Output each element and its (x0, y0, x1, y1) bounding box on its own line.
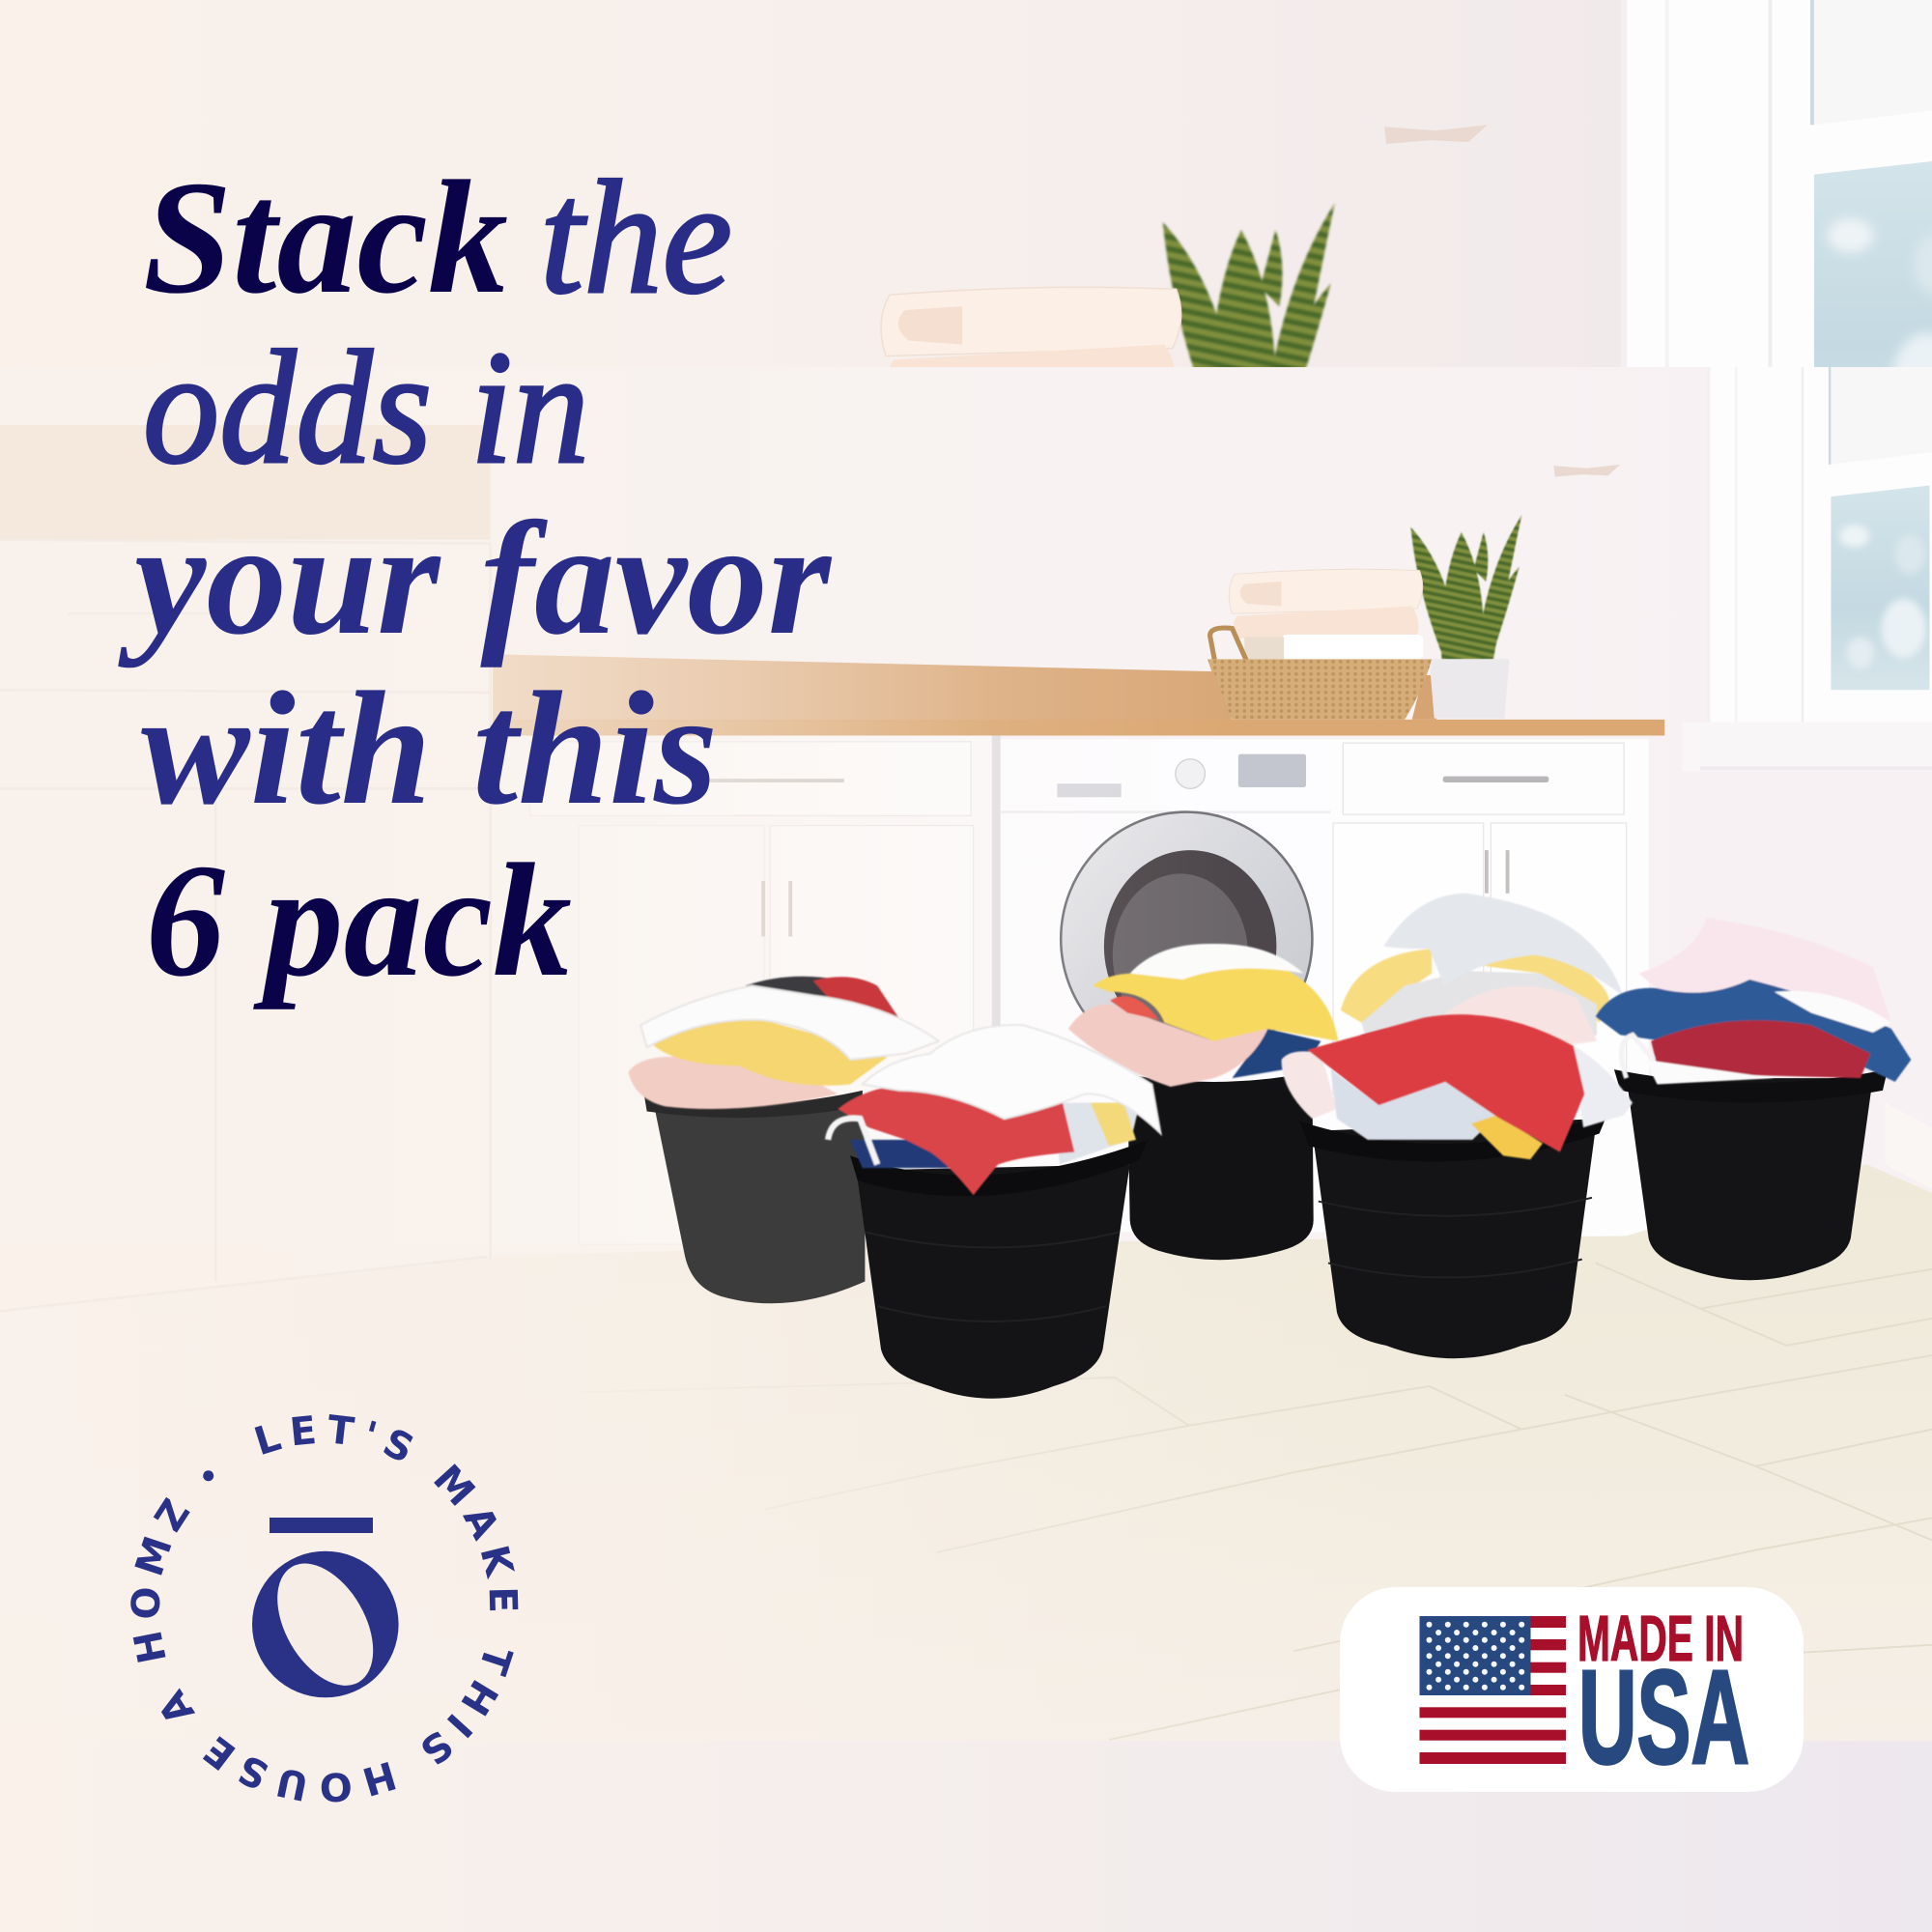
right base cabinets (1331, 739, 1649, 1238)
logo letter o counter (258, 1547, 393, 1702)
window sill (1802, 723, 1804, 726)
top strip: enlarged photo crop (880, 0, 1932, 367)
ring dot (203, 1470, 213, 1481)
main photo: laundry room (493, 367, 1932, 1741)
countertop (493, 720, 1664, 735)
headline line 5: 6 pack (146, 831, 572, 1010)
headline word: the: the (540, 148, 732, 327)
washing machine (1001, 739, 1331, 1233)
made in text: MADE IN (1577, 1603, 1744, 1675)
bottom band (0, 1741, 1932, 1932)
bucket: back right clothes (1341, 894, 1623, 1047)
bucket: back left with clothes (629, 977, 939, 1303)
left pale cabinet fronts (0, 540, 491, 1311)
bucket: front right with clothes (1282, 1014, 1633, 1358)
made in USA badge (1340, 1587, 1804, 1792)
headline line 3: your favor (118, 489, 833, 668)
wooden backsplash (493, 654, 1233, 721)
flag (1420, 1616, 1566, 1764)
circular brand logo (130, 1414, 518, 1803)
floor tiles (616, 1165, 1932, 1741)
logo letter o (252, 1551, 399, 1697)
badge background (1340, 1587, 1804, 1792)
headline (118, 148, 833, 1010)
USA text: USA (1578, 1643, 1749, 1792)
headline word: Stack: Stack (143, 148, 508, 327)
logo bar (270, 1518, 373, 1533)
bucket: back centre with clothes (1068, 944, 1338, 1260)
right wall baseboard (1886, 1103, 1932, 1189)
ring text: LET'S MAKE THIS HOUSE A HOMZ (130, 1414, 518, 1803)
bucket: right with clothes (1596, 918, 1911, 1280)
floor left fade (726, 1383, 1003, 1552)
headline line 4: with this (141, 659, 718, 838)
left pale cabinet top block (0, 425, 491, 540)
left fade overlay (0, 367, 1932, 1741)
headline line 2: odds in (143, 318, 589, 497)
bucket: front left with clothes (828, 1025, 1161, 1399)
window and shelf objects (1208, 367, 1932, 723)
left base cabinets (709, 736, 1001, 1030)
